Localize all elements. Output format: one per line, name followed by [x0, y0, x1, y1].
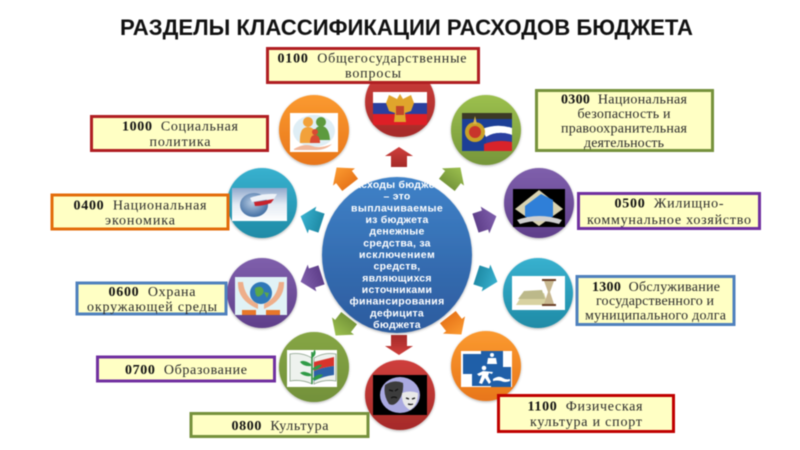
icon circle: debt service: [503, 258, 573, 328]
label: 0700: [98, 357, 274, 381]
central definition text: средства, за: [363, 237, 431, 249]
central definition text: финансирования: [350, 296, 444, 308]
arrow: left teal: [296, 203, 326, 236]
icon circle: education: [279, 332, 349, 402]
central definition text: [348, 179, 446, 331]
label: 0600: 0600 Охрана: [108, 285, 196, 300]
icon circle: general state questions: [365, 67, 435, 137]
central definition text: дефицита: [370, 307, 424, 319]
arrow: down red: [385, 335, 413, 355]
label: 0500: [578, 194, 760, 228]
central definition text: являющихся: [362, 272, 432, 284]
icon circle: security: [451, 95, 521, 165]
arrow: up red: [385, 147, 413, 167]
central definition text: источниками: [362, 284, 432, 296]
central definition text: выплачиваемые: [351, 202, 443, 214]
central definition text: бюджета: [373, 319, 421, 331]
label: 1300: государственного и: [596, 294, 714, 309]
arrow: up-right green: [436, 159, 471, 193]
label: 0500: коммунальное хозяйство: [587, 213, 751, 228]
central definition text: исключением: [359, 249, 435, 261]
label: 0300: [536, 90, 712, 151]
arrow: right purple: [471, 203, 501, 236]
label: 1100: 1100 Физическая: [528, 400, 643, 414]
central definition text: средств,: [374, 261, 420, 273]
central definition text: Расходы бюджета: [348, 179, 446, 191]
label: 0400: 0400 Национальная: [74, 198, 207, 214]
icon circle: physical culture: [451, 331, 521, 401]
label: 0300: правоохранительная: [561, 122, 688, 136]
label: 0400: [52, 195, 228, 229]
label: 1000: 1000 Социальная: [122, 120, 239, 134]
central definition text: денежные: [369, 226, 425, 238]
label: 1100: культура и спорт: [530, 415, 642, 430]
title: РАЗДЕЛЫ КЛАССИФИКАЦИИ РАСХОДОВ БЮДЖЕТА: [120, 15, 693, 40]
label: 1300: 1300 Обслуживание: [592, 280, 720, 295]
arrow: up-left orange: [326, 159, 361, 193]
label: 0300: безопасность и: [578, 107, 671, 122]
label: 1000: политика: [150, 135, 211, 150]
label: 0100: [268, 48, 478, 82]
label: 1100: [498, 396, 674, 432]
central definition text: из бюджета: [365, 214, 429, 226]
label: 1300: муниципального долга: [585, 308, 727, 324]
arrow: lower-right orange: [437, 309, 472, 343]
label: 0300: деятельность: [584, 136, 664, 151]
icon circle: housing: [504, 168, 574, 238]
icon circle: social policy: [279, 95, 349, 165]
label: 1000: [92, 116, 268, 150]
label: 0800: [191, 414, 368, 436]
arrow: lower-left green: [325, 310, 360, 344]
label: 0500: 0500 Жилищно-: [614, 196, 724, 212]
label: 1300: [577, 276, 734, 324]
icon circle: culture: [365, 360, 435, 430]
label: 0800: 0800 Культура: [232, 419, 329, 434]
label: 0600: окружающей среды: [87, 300, 218, 315]
label: 0300: 0300 Национальная: [561, 92, 688, 108]
label: 0100: вопросы: [345, 66, 402, 82]
label: 0100: 0100 Общегосударственные: [278, 52, 466, 66]
icon circle: environment: [227, 258, 297, 328]
label: 0400: экономика: [105, 214, 176, 228]
icon circle: national economy: [227, 168, 297, 238]
central definition text: – это: [383, 191, 411, 203]
central circle: [322, 177, 472, 333]
label: 0700: 0700 Образование: [125, 363, 247, 378]
label: 0600: [77, 283, 226, 315]
arrow: lower-left purple: [296, 262, 326, 295]
arrow: lower-right teal: [472, 262, 502, 295]
